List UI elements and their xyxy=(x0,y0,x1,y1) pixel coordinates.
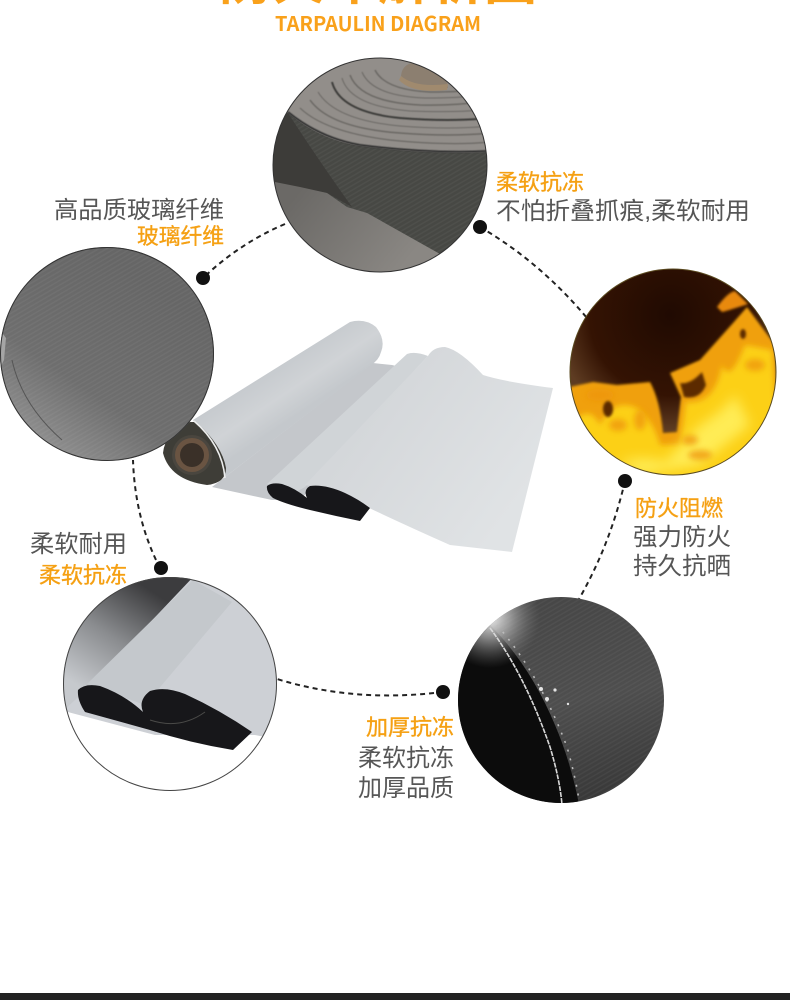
flame dark pockets xyxy=(603,329,746,417)
top sheet xyxy=(305,347,553,552)
label: top left: 玻璃纤维 xyxy=(137,224,224,249)
dark wedge xyxy=(270,113,352,207)
label: top left xyxy=(54,197,224,249)
label: right: 强力防火 xyxy=(633,524,731,551)
label: bottom right: 柔软抗冻 xyxy=(358,745,454,772)
title xyxy=(219,0,537,37)
circle: folded fabric edge xyxy=(60,575,280,795)
circle: stitched seam xyxy=(458,597,664,803)
label: bottom right: 加厚品质 xyxy=(358,775,454,802)
roll body xyxy=(193,321,383,477)
roll end with spiral core xyxy=(163,421,226,485)
label: right: 防火阻燃 xyxy=(635,496,723,521)
circle: rolled fabric close-up xyxy=(270,50,490,280)
lower fold xyxy=(275,182,439,272)
orange swirls xyxy=(586,359,765,460)
circle: flames xyxy=(565,265,780,480)
label: top right: 不怕折叠抓痕,柔软耐用 xyxy=(496,198,750,225)
subtitle: TARPAULIN DIAGRAM xyxy=(275,8,481,37)
central product photo: fabric roll xyxy=(163,321,553,552)
label: bottom right xyxy=(358,715,454,802)
cardboard core xyxy=(401,62,448,88)
label: right xyxy=(633,496,731,580)
flame tip xyxy=(717,291,748,312)
dark blurred background xyxy=(63,577,190,706)
dashed connector ring xyxy=(133,224,625,695)
orange flame layer xyxy=(572,306,776,449)
bottom dark bar xyxy=(0,993,790,1000)
top-left fade xyxy=(467,602,534,665)
seam stitches xyxy=(490,628,562,805)
label: bottom right: 加厚抗冻 xyxy=(366,715,454,740)
yellow flame layer xyxy=(580,343,776,474)
fold band xyxy=(87,580,232,705)
label: bottom left xyxy=(30,531,127,588)
label: top right xyxy=(496,170,750,225)
circle: woven glass fibre surface xyxy=(0,245,216,465)
rolled layers xyxy=(288,58,486,153)
black lower-left area xyxy=(458,625,578,803)
label: right: 持久抗晒 xyxy=(633,553,731,580)
bright flame core xyxy=(620,395,750,475)
sheet background xyxy=(60,575,280,740)
label: bottom left: 柔软耐用 xyxy=(30,531,127,558)
label: bottom left: 柔软抗冻 xyxy=(39,563,127,588)
label: top right: 柔软抗冻 xyxy=(496,170,584,195)
connector dots xyxy=(154,220,632,699)
middle fold xyxy=(267,353,428,492)
flat sheet under roll xyxy=(212,363,420,500)
label: top left: 高品质玻璃纤维 xyxy=(54,197,224,224)
black folds xyxy=(78,685,252,750)
dark underside fold xyxy=(267,483,370,521)
